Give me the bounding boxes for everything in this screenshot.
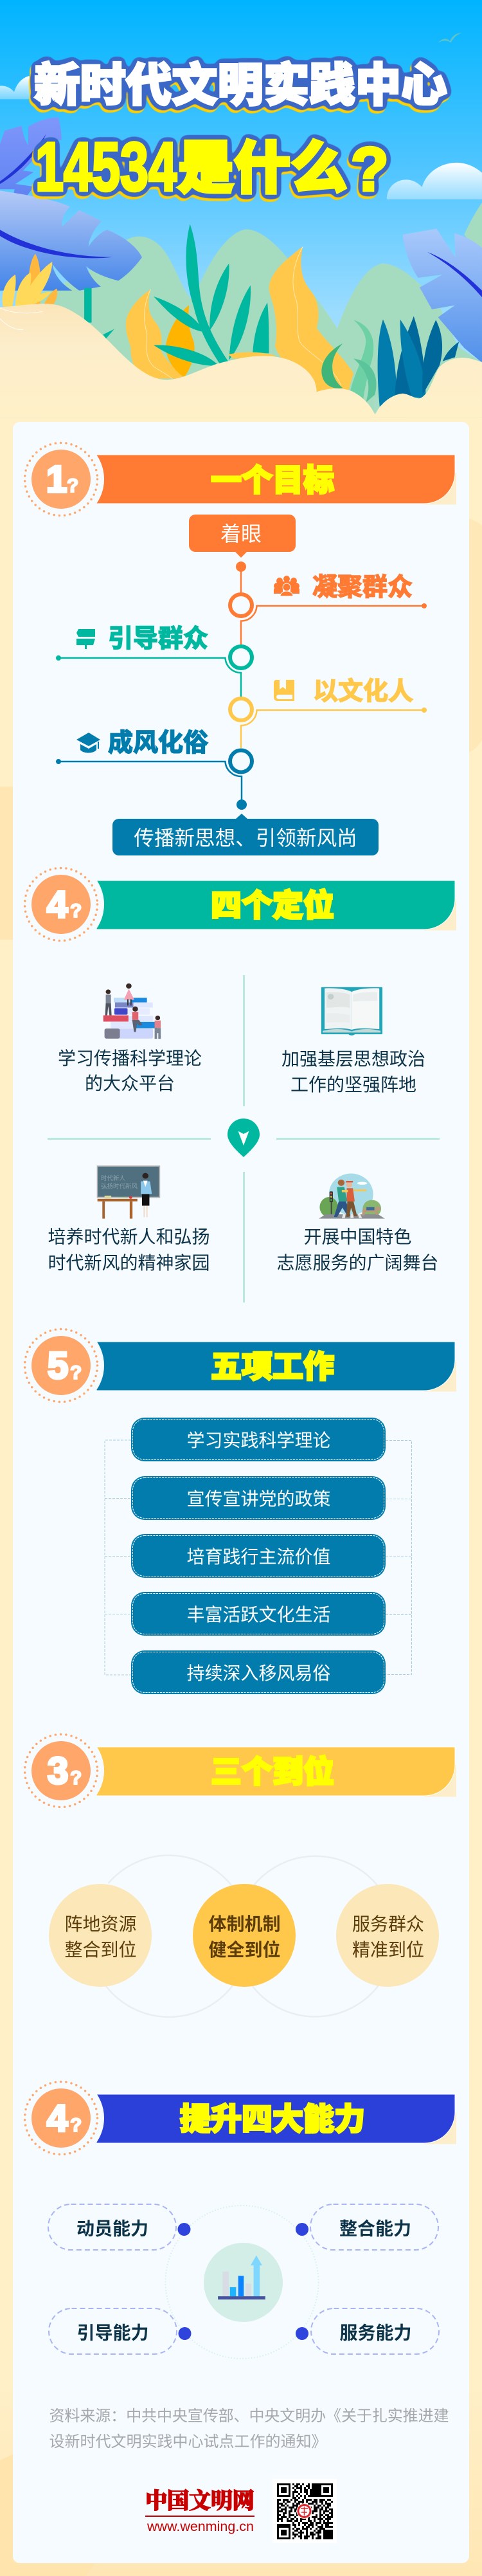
section header: 提升四大能力: 4 [47, 2097, 67, 2139]
node: 引导群众 [56, 625, 252, 697]
section header: 四个定位: 4 [47, 884, 67, 926]
section header: 一个目标: ? [67, 475, 78, 497]
text: 培养时代新人: 培养时代新人和弘扬 [48, 1227, 210, 1247]
circle: 阵地资源: 整合到位 [64, 1940, 137, 1960]
work item 3 [131, 1534, 386, 1578]
text: 学习传播科学理论: 学习传播科学理论 [58, 1048, 202, 1068]
circle: 体制机制: 体制机制 [208, 1914, 281, 1934]
node: 凝聚群众 [230, 567, 427, 645]
section header: 三个到位: 3 [48, 1750, 68, 1792]
circle: 服务群众: 精准到位 [352, 1940, 424, 1960]
node: 凝聚群众: 凝聚群众 [312, 574, 413, 601]
text: 开展中国特色: 开展中国特色 [303, 1227, 412, 1247]
node: 成风化俗: 成风化俗 [108, 729, 208, 757]
teal plant [186, 224, 228, 364]
illustration: volunteers [319, 1174, 385, 1219]
circle: 体制机制: 健全到位 [208, 1939, 281, 1960]
callout: 着眼 [189, 515, 296, 558]
work item 5 [131, 1650, 386, 1694]
connectors: five works [105, 1440, 411, 1675]
section header: 三个到位: 三个到位 [211, 1755, 334, 1789]
icon: location pin [228, 1119, 260, 1157]
pill: 引导能力: 引导能力 [76, 2323, 149, 2343]
section header: 一个目标: 一个目标 [211, 464, 334, 498]
work item 4 [131, 1592, 386, 1636]
node: 成风化俗 [56, 729, 252, 805]
pill: 动员能力 [48, 2204, 176, 2250]
section header: 五项工作: 5 [48, 1345, 68, 1387]
illustration: open book [321, 987, 382, 1036]
title line 2: 14534 [35, 128, 177, 205]
source note: 设新时代文明实践中心试点工作的通知》 [49, 2433, 326, 2451]
source note: 资料来源：中共中央宣传部、中央文明办《关于扎实推进建 [49, 2407, 449, 2425]
icon: book [274, 680, 294, 701]
section header: 一个目标: 1 [46, 459, 67, 500]
circle: 服务群众: 服务群众 [352, 1914, 424, 1934]
diagram: three circles [49, 1856, 439, 2017]
section header: 五项工作: 五项工作 [211, 1350, 334, 1384]
work item 1 [131, 1418, 386, 1461]
title line 2: 是什么 [177, 136, 347, 200]
icon: signpost [76, 629, 95, 649]
text: 加强基层思想政治: 加强基层思想政治 [281, 1049, 425, 1069]
seaweed and crescent [349, 320, 373, 408]
logo: 中国文明网 [145, 2483, 254, 2534]
section header: 提升四大能力: ? [70, 2115, 82, 2136]
pill: 整合能力: 整合能力 [339, 2219, 411, 2238]
pill: 动员能力: 动员能力 [76, 2219, 148, 2238]
pill: 服务能力 [311, 2308, 439, 2354]
logo: 中国文明网: www.wenming.cn [147, 2519, 254, 2534]
connector dots [177, 2223, 308, 2340]
section header: 一个目标 [18, 436, 456, 522]
hero illustration [0, 0, 482, 418]
leaf: upper left [0, 117, 62, 212]
icon: bird [438, 33, 462, 42]
section header: 四个定位: 四个定位 [211, 888, 334, 923]
work item 2 [131, 1476, 386, 1520]
work item 5: 持续深入移风易俗 [186, 1663, 331, 1683]
text: 加强基层思想政治: 工作的坚强阵地 [290, 1075, 416, 1095]
pill: 引导能力 [49, 2308, 177, 2354]
work item 1: 学习实践科学理论 [186, 1430, 331, 1450]
title line 1: 新时代文明实践中心 [34, 60, 447, 111]
section header: 提升四大能力: 提升四大能力 [180, 2103, 365, 2137]
callout: 着眼: 着眼 [220, 522, 262, 545]
callout: 传播新思想 [112, 814, 379, 855]
text: 培养时代新人: 时代新风的精神家园 [48, 1253, 210, 1273]
sand foreground [0, 304, 482, 418]
timeline: 一个目标 [56, 515, 427, 855]
leaf: right [403, 229, 482, 363]
text: 开展中国特色: 志愿服务的广阔舞台 [276, 1253, 439, 1273]
logo: 中国文明网: 中国文明网 [145, 2483, 254, 2515]
leaf: big left [0, 190, 142, 291]
main panel [13, 422, 469, 2563]
icon: people [274, 576, 299, 596]
circle: 体制机制 [193, 1884, 296, 1987]
blackboard text [101, 1174, 138, 1190]
diagram: four capabilities [48, 2204, 439, 2359]
small yellow plant left [28, 254, 41, 307]
work item 4: 丰富活跃文化生活 [186, 1605, 331, 1625]
node: 以文化人: 以文化人 [313, 678, 413, 706]
node: 引导群众: 引导群众 [108, 625, 208, 653]
pill: 整合能力 [310, 2204, 438, 2250]
orange leaves [126, 289, 184, 379]
section header: 三个到位 [18, 1728, 456, 1814]
title line 2 [35, 128, 389, 205]
blue spikes [378, 320, 397, 406]
section header: 四个定位: ? [70, 900, 82, 922]
circle: 阵地资源 [49, 1884, 152, 1987]
callout: 传播新思想: 传播新思想、引领新风尚 [134, 827, 357, 850]
icon: bar chart [204, 2243, 283, 2322]
section header: 五项工作: ? [70, 1362, 82, 1384]
section header: 五项工作 [18, 1322, 456, 1409]
section header: 三个到位: ? [70, 1768, 82, 1789]
illustration: blackboard and teacher [97, 1165, 160, 1219]
cloud left [0, 76, 34, 99]
QR code [272, 2479, 337, 2543]
section header: 四个定位 [18, 861, 456, 947]
title [34, 60, 447, 205]
icon: graduation cap [76, 733, 100, 753]
pill: 服务能力: 服务能力 [339, 2323, 412, 2343]
cross dividers [48, 975, 440, 1302]
circle: 阵地资源: 阵地资源 [64, 1914, 137, 1934]
cloud right [387, 163, 482, 199]
blackboard text: 时代新人 [101, 1174, 126, 1182]
section header: 提升四大能力 [18, 2075, 456, 2161]
blackboard text: 弘扬时代新风 [101, 1182, 138, 1190]
illustration: books and students [103, 983, 161, 1039]
title line 2: ? [351, 135, 389, 204]
work item 3: 培育践行主流价值 [186, 1547, 331, 1567]
text: 学习传播科学理论: 的大众平台 [85, 1073, 175, 1093]
work item 2: 宣传宣讲党的政策 [186, 1489, 331, 1509]
hills [40, 229, 482, 418]
circle: 服务群众 [336, 1884, 439, 1987]
node: 以文化人 [230, 678, 427, 748]
